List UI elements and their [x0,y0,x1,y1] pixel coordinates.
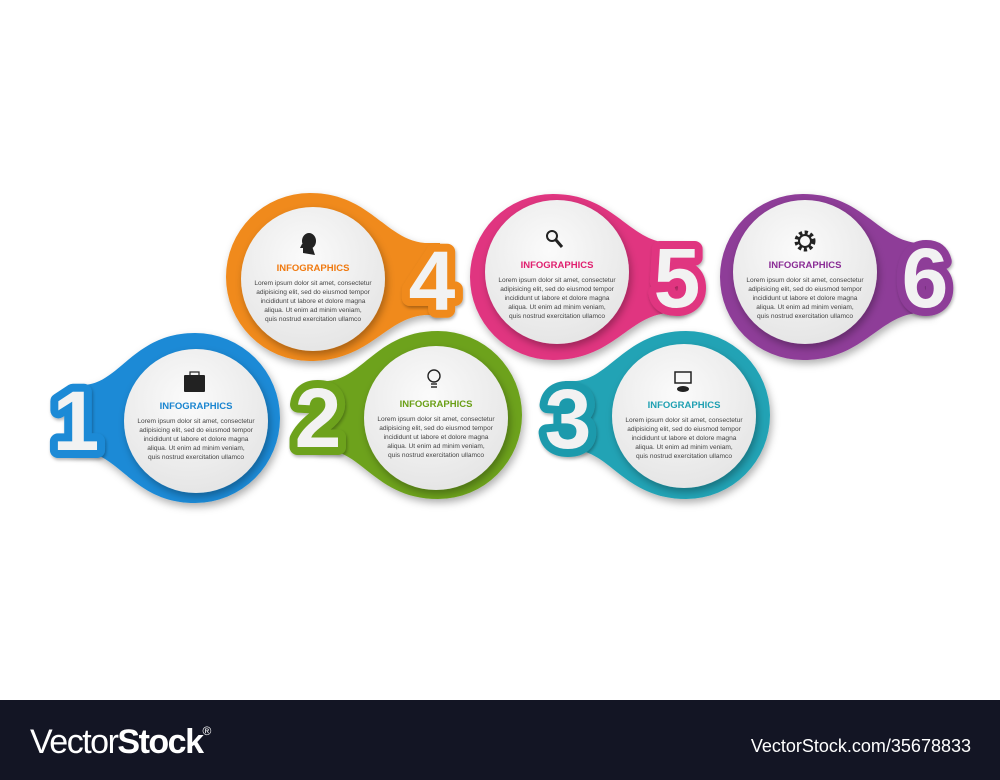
icon: magnifier [547,231,562,247]
item 1: aliqua. Ut enim ad minim veniam, [147,445,245,452]
item 2: adipisicing elit, sed do eiusmod tempor [379,425,494,432]
item 1: adipisicing elit, sed do eiusmod tempor [139,427,254,434]
numeral 6: 6 [902,231,948,325]
item 6: INFOGRAPHICS [769,260,841,271]
icon: monitor [675,372,691,392]
icon: head [300,233,316,255]
item 1: Lorem ipsum dolor sit amet, consectetur [137,418,255,425]
item 5 [470,194,700,360]
item 2 [295,331,522,499]
item 3 [545,331,770,499]
item 1: incididunt ut labore et dolore magna [144,436,249,443]
item 4: incididunt ut labore et dolore magna [261,298,366,305]
item 5: aliqua. Ut enim ad minim veniam, [508,304,606,311]
item 6: adipisicing elit, sed do eiusmod tempor [748,286,863,293]
icon: gear [797,233,813,249]
item 2: aliqua. Ut enim ad minim veniam, [387,443,485,450]
item 4: Lorem ipsum dolor sit amet, consectetur [254,280,372,287]
item 4: adipisicing elit, sed do eiusmod tempor [256,289,371,296]
footer logo: VectorStock [30,723,202,761]
numeral 1: 1 [53,374,99,468]
item 6: aliqua. Ut enim ad minim veniam, [756,304,854,311]
icon: briefcase [184,372,205,392]
item 1: quis nostrud exercitation ullamco [148,454,244,461]
item 2: Lorem ipsum dolor sit amet, consectetur [377,416,495,423]
item 3: Lorem ipsum dolor sit amet, consectetur [625,417,743,424]
numeral 5: 5 [654,231,700,325]
item 5: adipisicing elit, sed do eiusmod tempor [500,286,615,293]
footer bar [0,700,1000,780]
item 1 [53,333,280,503]
footer logo: ® [202,724,211,738]
item 6: incididunt ut labore et dolore magna [753,295,858,302]
numeral 2: 2 [295,371,341,465]
item 4: aliqua. Ut enim ad minim veniam, [264,307,362,314]
item 2: INFOGRAPHICS [400,399,472,410]
footer url: VectorStock.com/35678833 [751,736,971,756]
numeral 3: 3 [545,372,591,466]
item 5: Lorem ipsum dolor sit amet, consectetur [498,277,616,284]
numeral 4: 4 [409,234,456,328]
item 5: incididunt ut labore et dolore magna [505,295,610,302]
item 4: quis nostrud exercitation ullamco [265,316,361,323]
item 2: incididunt ut labore et dolore magna [384,434,489,441]
item 3: incididunt ut labore et dolore magna [632,435,737,442]
item 4 [226,193,456,361]
item 6 [720,194,948,360]
item 2: quis nostrud exercitation ullamco [388,452,484,459]
item 5: INFOGRAPHICS [521,260,593,271]
icon: light bulb [428,370,440,387]
item 5: quis nostrud exercitation ullamco [509,313,605,320]
item 3: INFOGRAPHICS [648,400,720,411]
item 6: Lorem ipsum dolor sit amet, consectetur [746,277,864,284]
item 3: quis nostrud exercitation ullamco [636,453,732,460]
item 3: aliqua. Ut enim ad minim veniam, [635,444,733,451]
item 1: INFOGRAPHICS [160,401,232,412]
item 3: adipisicing elit, sed do eiusmod tempor [627,426,742,433]
item 4: INFOGRAPHICS [277,263,349,274]
item 6: quis nostrud exercitation ullamco [757,313,853,320]
